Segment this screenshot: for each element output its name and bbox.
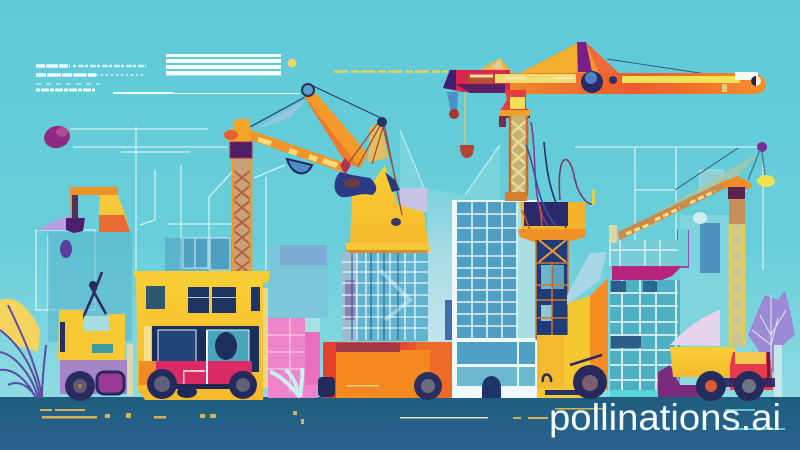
vehicle wedge [567,252,607,305]
crane three top pin [757,142,767,152]
crane one cable mast [368,120,388,162]
crane two cab [500,90,531,111]
background building outlines [36,127,763,310]
magenta band [612,266,682,280]
crane two ball [581,71,603,93]
crane three counterweight [757,175,775,187]
orange red truck [318,342,453,400]
truck cab [323,342,400,398]
yellow dot [288,58,296,68]
right construction vehicle [537,252,608,399]
central glass tower [342,253,428,341]
right grid building [610,230,688,397]
small excavator [60,187,130,258]
bus red panel [155,361,252,385]
watermark text: pollinations.ai [549,397,781,438]
right truck shadow [658,365,720,397]
crane three jib [617,152,760,240]
top white bars [166,54,281,76]
right truck [658,347,775,401]
top-left text lines [36,66,300,94]
excavator bucket [66,218,85,233]
crane two small mast [480,58,512,72]
vehicle arm [543,355,602,382]
excavator body [99,195,130,232]
crane one diagonal arm [304,92,368,168]
crane two large mast [520,41,620,76]
crane three tower [729,200,745,224]
crane one [224,84,431,274]
vehicle body [537,296,590,398]
crane one jib [250,130,345,172]
crane two [443,41,766,201]
crane two label band [495,74,576,83]
excavator arm [70,187,118,222]
pale pink wedge [670,310,720,346]
crane two counter jib [443,70,510,93]
right truck cab [730,352,773,390]
forklift scissor arm [83,272,106,318]
left hangers [447,92,458,113]
vehicle wheel [573,365,607,399]
crane three cab [717,176,752,200]
ground road [0,397,800,450]
crane three [609,142,775,346]
purple wrecking ball [42,123,72,151]
curved cables [522,122,592,230]
forklift body [58,310,125,360]
lattice elevator [536,240,568,340]
left forklift [58,272,133,401]
crane one claw [335,172,376,197]
bus upper body [133,271,270,400]
cage platform [518,229,586,243]
crane one glasses hook [287,159,312,173]
bus upper windows [146,286,260,313]
truck wheels [318,377,335,397]
crane one cab [224,119,251,143]
back-left grid building [183,238,230,270]
crane one tower [233,156,251,274]
right pink building [268,318,320,398]
office door [482,376,501,398]
pale background blocks [36,130,735,400]
yellow dashed caption [334,70,448,73]
left purple fern [0,305,46,398]
truck container [336,352,416,398]
bus wheels [147,369,177,399]
central blue office tower [445,200,538,398]
crane two tower [510,116,527,196]
crane two jib [505,73,766,94]
crane one cables [250,86,381,127]
forklift bag [97,372,124,394]
cage back [520,202,585,230]
bus building [133,271,270,400]
central yellow block [345,165,431,253]
right truck wheels [696,371,726,401]
forklift base [60,360,127,394]
road markings [40,408,785,430]
bus chassis [150,384,250,389]
forklift wheel [65,371,95,401]
cage platform with cables [518,122,595,243]
left yellow bush [0,299,40,352]
purple tree [748,290,795,397]
right truck body [670,347,735,377]
bus lower cabin [152,326,259,372]
